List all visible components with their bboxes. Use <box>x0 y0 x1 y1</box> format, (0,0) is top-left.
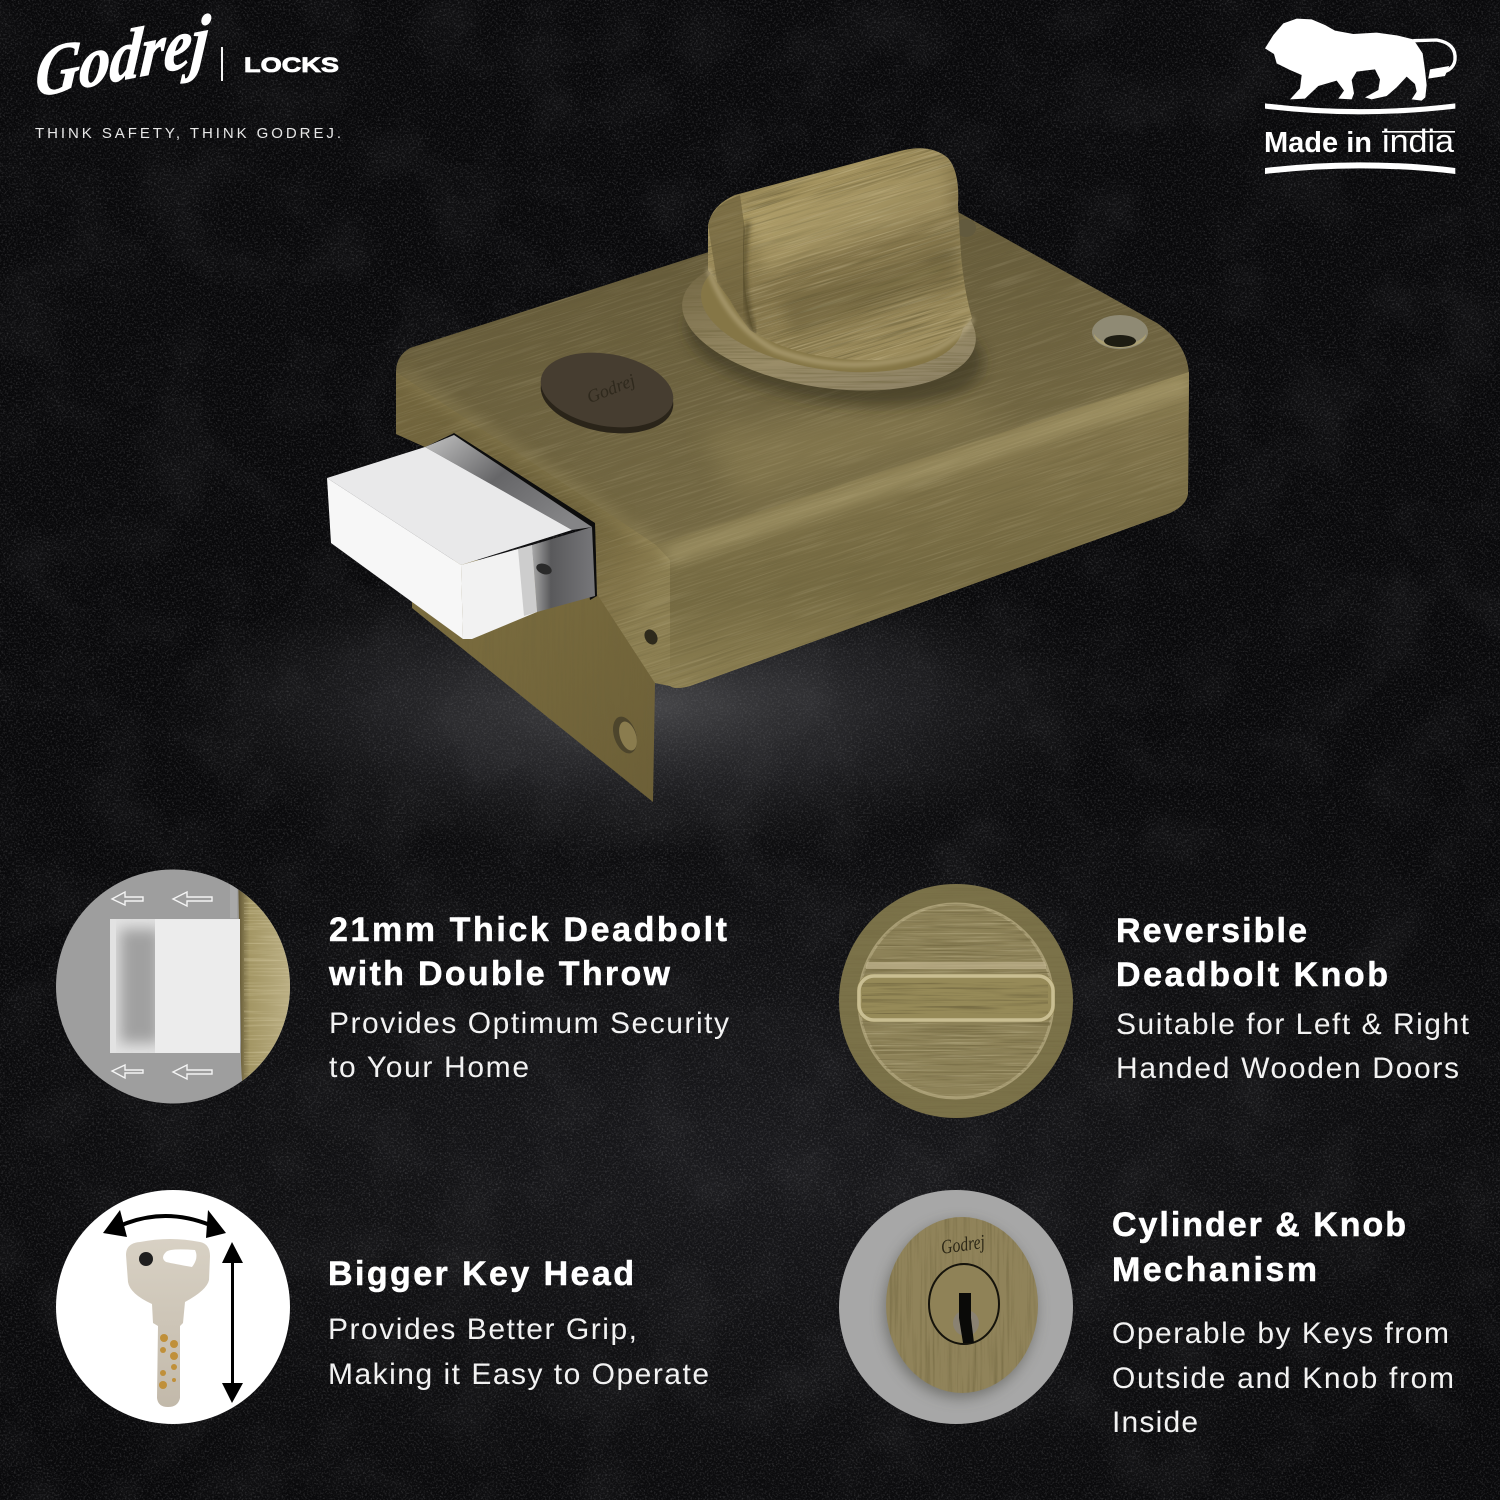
knob base disc <box>682 271 976 390</box>
heading line two: Deadbolt Knob <box>1116 956 1388 994</box>
logo: Godrej Locks <box>33 0 341 142</box>
deadbolt knob <box>682 148 988 412</box>
tagline: THINK SAFETY, THINK GODREJ. <box>35 125 341 142</box>
opening <box>450 433 597 600</box>
label: Made in: Made in <box>1264 127 1372 159</box>
key <box>126 1239 210 1407</box>
heading line two: Mechanism <box>1112 1251 1317 1289</box>
badge: logo cap <box>535 343 679 443</box>
knob shadow <box>678 267 992 423</box>
description line two: Making it Easy to Operate <box>328 1358 709 1391</box>
description: Operable by Keys from <box>1112 1317 1449 1350</box>
arrows <box>112 892 212 1079</box>
description: Provides Better Grip, <box>328 1313 637 1346</box>
front face <box>656 372 1189 688</box>
description: Suitable for Left & Right <box>1116 1008 1470 1041</box>
heading: Cylinder & Knob <box>1112 1206 1406 1244</box>
bolt head top <box>327 447 572 565</box>
screw hole right <box>1092 315 1148 349</box>
heading: Bigger Key Head <box>328 1255 634 1293</box>
side pin <box>642 627 660 647</box>
knob handle <box>704 148 976 368</box>
lock body <box>396 212 1189 688</box>
feature: deadbolt <box>56 868 729 1108</box>
bolt shaft side <box>532 527 595 612</box>
bolt shaft top <box>425 435 592 530</box>
arrow: width <box>103 1210 226 1238</box>
heading line two: with Double Throw <box>328 955 671 993</box>
icon: key with size arrows <box>56 1190 290 1424</box>
lower mounting plate <box>412 560 655 802</box>
description line three: Inside <box>1112 1406 1198 1439</box>
product line: LOCKS <box>244 54 339 77</box>
icon: lion silhouette <box>1265 19 1455 174</box>
icon: deadbolt double throw <box>56 868 296 1108</box>
heading: Reversible <box>1116 912 1307 950</box>
icon: reversible knob <box>835 880 1080 1125</box>
small logo on plate: Godrej <box>940 1231 987 1259</box>
description line two: Outside and Knob from <box>1112 1362 1454 1395</box>
steel bolt <box>327 433 597 639</box>
feature: cylinder <box>839 1190 1454 1439</box>
icon: cylinder keyhole <box>839 1190 1073 1424</box>
arrow: height <box>222 1242 243 1403</box>
label: india: india <box>1382 123 1454 159</box>
description: Provides Optimum Security <box>329 1007 729 1040</box>
heading: 21mm Thick Deadbolt <box>329 911 727 949</box>
description line two: Handed Wooden Doors <box>1116 1052 1459 1085</box>
description line two: to Your Home <box>329 1051 529 1084</box>
bolt head right <box>461 545 537 639</box>
bolt head left <box>327 478 463 639</box>
screw hole rear <box>956 219 976 237</box>
bolt end face <box>396 372 670 686</box>
small logo on cap: Godrej <box>584 370 638 407</box>
main product: rim deadbolt lock <box>327 148 1189 802</box>
feature: key <box>56 1190 709 1424</box>
badge: Made in India <box>1264 19 1455 174</box>
feature: knob <box>835 880 1470 1125</box>
